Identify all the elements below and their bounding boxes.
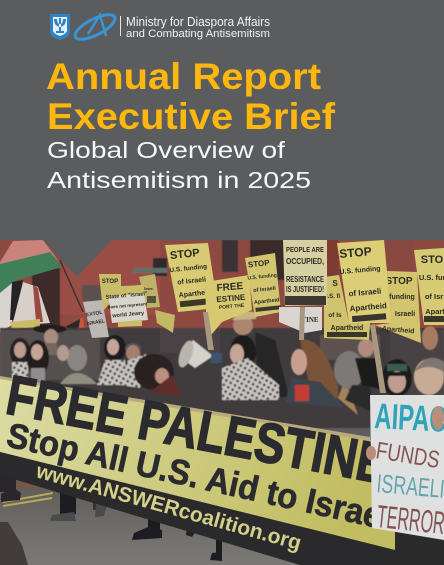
sign: back left small (99, 274, 121, 311)
hands holding sign (366, 406, 444, 460)
ministry name (126, 14, 270, 40)
sign: back centre small: Jews (143, 286, 154, 291)
sign: stop funding second: Apartheid (254, 297, 280, 306)
sign: yellow small centre (155, 310, 175, 333)
subtitle (47, 137, 311, 193)
crowd (0, 311, 444, 428)
sign: free palestine: FREE (216, 281, 244, 294)
man with black hat (33, 325, 67, 355)
logo row (50, 10, 270, 44)
sign: stop behind right: Apartheid (382, 326, 415, 335)
blonde woman (414, 326, 444, 395)
sign: state of Israel (105, 285, 150, 327)
banner text: stop all aid: Stop All U.S. Aid to Israel (3, 416, 395, 538)
sign: people are occupied: IS JUSTIFIED! (286, 285, 324, 294)
banner text: web address: www.ANSWERcoalition.org (33, 459, 304, 555)
sign: stop behind right: STOP (385, 276, 413, 287)
panel: grey header (0, 0, 444, 277)
protest signs (83, 240, 444, 393)
hand sign: AIPAC funds Israeli terror (366, 395, 444, 541)
ministry name: Ministry for Diaspora Affairs (126, 14, 270, 29)
sign: people are occupied: RESISTANCE (286, 275, 324, 284)
woman in grey scarf (334, 351, 372, 412)
icon: state emblem (50, 14, 70, 40)
sign: free palestine: ESTINE (216, 293, 246, 304)
woman in hijab and keffiyeh (97, 335, 128, 385)
woman in dark hair (10, 338, 30, 382)
woman with long dark hair (27, 340, 49, 382)
subtitle: Antisemitism in 2025 (47, 167, 311, 193)
sign: stop funding second (245, 253, 282, 317)
sign poles (203, 307, 386, 393)
sign: stop behind right: funding (389, 294, 415, 301)
woman with reddish hair (285, 340, 358, 415)
man with keffiyeh (120, 343, 146, 388)
title: Annual Report (46, 56, 321, 97)
divider (120, 16, 121, 36)
sign: state of Israel: does not represent (108, 301, 148, 310)
megaphone (176, 339, 222, 369)
sign: back stop centre (324, 275, 370, 340)
sign: people are occupied: OCCUPIED, (286, 257, 324, 266)
road markings (3, 492, 53, 507)
sign: big stop centre right (337, 240, 392, 323)
banner yellow cloth (0, 378, 395, 550)
sign: stop far right: of Isr (425, 292, 443, 301)
sign: free palestine: PORT THE (219, 303, 245, 311)
sign: people are occupied (283, 240, 327, 306)
sign: big stop centre right: Apartheid (349, 301, 387, 313)
person in grey hood (57, 345, 97, 384)
sign: big stop centre right: of Israeli (348, 287, 382, 298)
woman with cap and sunglasses (382, 359, 412, 397)
sign: big stop left: STOP (169, 247, 200, 262)
icon: ministry swoosh (72, 10, 118, 44)
man in black jacket (232, 311, 289, 397)
subtitle: Global Overview of (47, 137, 286, 163)
ministry name: and Combating Antisemitism (126, 28, 270, 40)
sign: back stop centre: S (332, 279, 338, 288)
panel: photo of protest (0, 240, 444, 565)
sign: white left: EXTOL (86, 310, 103, 318)
sign: state of Israel: State of "Israel" (105, 291, 148, 301)
sign: stop funding second: of Israeli (253, 286, 277, 294)
sign: big stop left (165, 243, 218, 312)
sign: back stop centre: of Is (328, 312, 342, 319)
banner top edge (0, 376, 370, 441)
legs and shoes (0, 470, 444, 565)
sign: white left: ISRAEL (86, 318, 105, 327)
sign: stop funding second: U.S. funding (247, 273, 277, 282)
sign: big stop left: of Israeli (177, 276, 206, 286)
banner (0, 363, 395, 565)
sign: big stop centre right: STOP (339, 244, 372, 261)
sign: state of Israel: world Jewry (111, 310, 145, 319)
sign: big stop left: Apartheid (178, 289, 212, 299)
title (46, 56, 336, 137)
banner dark strip (0, 452, 395, 565)
woman in dark scarf (355, 339, 384, 390)
flag (0, 240, 90, 367)
sign: stop behind right (375, 271, 421, 343)
sign: stop far right (414, 248, 444, 325)
road (0, 470, 444, 565)
sign: big stop centre right: U.S. funding (339, 266, 381, 276)
sign: white behind poles: TINE (301, 316, 319, 324)
sign: back stop centre: I.S. fi (326, 294, 340, 300)
sign: stop behind right: Israeli (395, 311, 415, 318)
woman in keffiyeh with megaphone (222, 335, 279, 400)
sign: stop funding second: STOP (248, 258, 271, 269)
sign: people are occupied: PEOPLE ARE (286, 247, 324, 254)
sign: back stop centre: Apartheid (331, 325, 363, 332)
sign: back centre small (139, 274, 160, 308)
sign: white behind poles (279, 307, 322, 333)
title: Executive Brief (47, 96, 336, 137)
sign: stop far right: STO (421, 254, 444, 266)
sign: back left small: STOP (102, 279, 118, 285)
woman with curly hair (134, 354, 182, 396)
sign: white left (83, 300, 109, 338)
brick building background (0, 240, 444, 350)
sign: free palestine (205, 275, 252, 340)
sign: big stop left: U.S. funding (169, 263, 207, 274)
